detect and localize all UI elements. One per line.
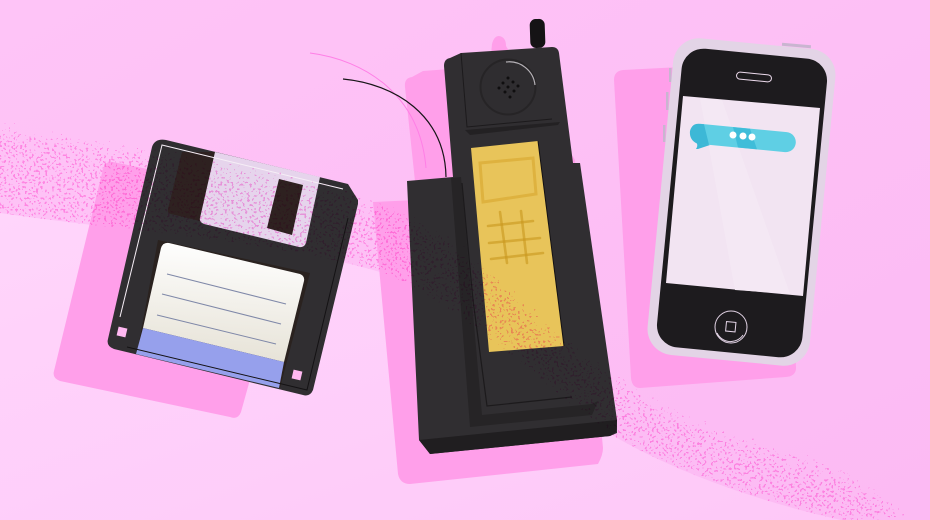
home button [715,311,747,343]
panel: handset backing shape [373,36,603,484]
black wire [343,79,446,177]
label blue stripe [136,328,284,388]
floppy body [108,140,358,395]
label sheet [143,243,304,362]
screen glare [700,98,790,294]
floppy label recess [137,240,310,388]
phone screen [666,96,820,296]
stippled grain band [0,105,930,520]
base front face [419,420,617,454]
handset phone [407,19,617,454]
floppy shutter slot [168,152,215,221]
label writing lines [157,274,286,344]
panel: smartphone backing shape [614,66,796,388]
speaker holes [498,76,520,98]
screen outline [480,158,536,202]
phone case [645,36,838,368]
pink wire [310,53,426,168]
inner shaded recess [451,177,598,427]
smartphone [645,36,838,368]
earpiece [736,72,772,82]
floppy corner hole right [292,370,302,380]
floppy shutter window [267,179,303,235]
side buttons [663,43,811,142]
inner ridge line [462,183,572,406]
floppy bottom and side lines [127,218,348,390]
antenna [530,19,546,48]
typing dots [730,132,756,140]
floppy disk [108,140,358,395]
speaker plate edge [461,53,552,127]
floppy metal shutter [200,152,320,247]
phone black front [655,47,829,359]
floppy paper label [117,218,348,390]
keypad grid [488,211,543,263]
speaker highlight arc [506,62,535,85]
yellow display panel [471,141,564,352]
bubble dark left [690,124,709,145]
bubble tail [695,140,710,149]
panel edge [538,141,564,346]
speaker circle [480,60,536,114]
panel: floppy disk backing shape [54,162,300,418]
bubble body [689,123,797,153]
lower light wave [0,213,850,520]
speaker plate ledge [465,122,560,135]
floppy corner hole left [117,327,127,337]
message bubble [689,123,797,153]
handset and base body [407,47,617,454]
floppy edge highlights [120,145,343,317]
bubble dark middle [733,127,757,149]
